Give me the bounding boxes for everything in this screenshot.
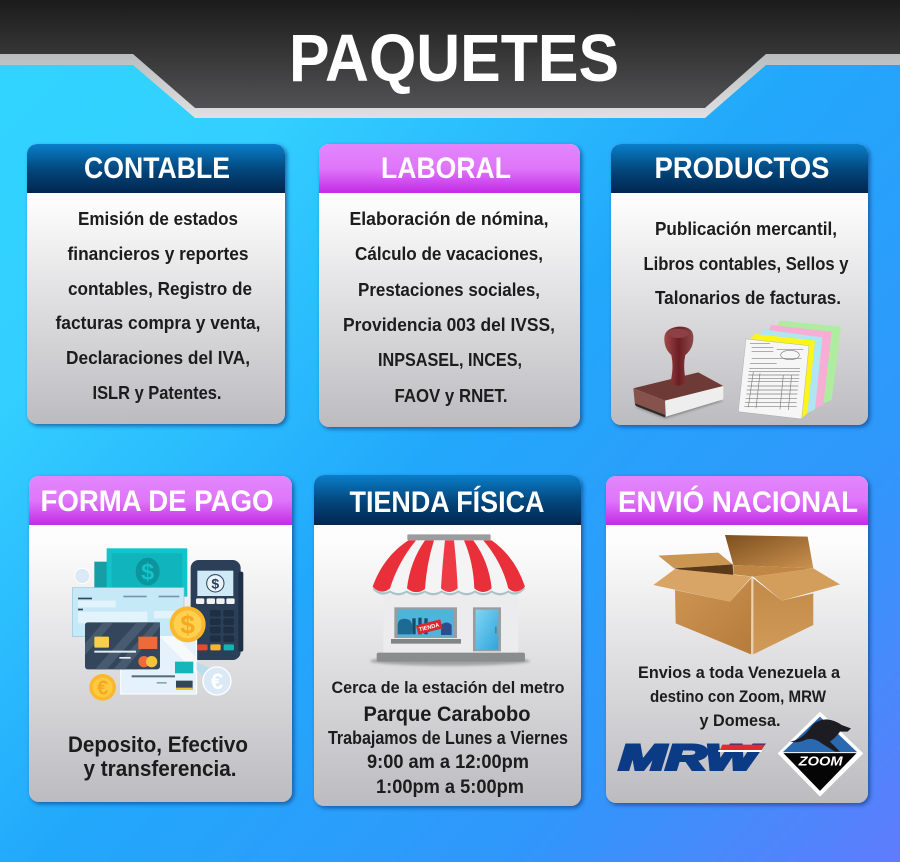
panel: envio nacional: ENVIÓ NACIONAL	[618, 485, 858, 519]
logo: ZOOM	[778, 712, 863, 797]
icon: store: TIENDA	[419, 623, 440, 633]
panel: contable: CONTABLE	[84, 152, 230, 185]
panel: tienda fisica: Trabajamos de Lunes a Viernes	[328, 728, 568, 748]
icon: payment methods: $	[211, 576, 219, 592]
icon: stamp	[633, 327, 723, 418]
logo: ZOOM: ZOOM	[798, 753, 844, 768]
panel: tienda fisica: Parque Carabobo	[364, 703, 530, 726]
panel: laboral: INPSASEL, INCES,	[378, 349, 522, 370]
panel: contable: Declaraciones del IVA,	[66, 347, 250, 368]
panel: tienda fisica: Cerca de la estación del metro	[332, 678, 564, 697]
panel: forma de pago	[29, 476, 292, 802]
panel: laboral: FAOV y RNET.	[394, 385, 508, 406]
panel: contable: ISLR y Patentes.	[92, 382, 222, 403]
logo: MRW: MRW	[619, 738, 763, 777]
panel: envio nacional: Envios a toda Venezuela a	[638, 663, 841, 682]
panel: contable	[27, 144, 285, 424]
panel: productos: Talonarios de facturas.	[655, 287, 841, 308]
panel: envio nacional: destino con Zoom, MRW	[650, 687, 827, 706]
panel: productos: Publicación mercantil,	[655, 218, 837, 239]
title: PAQUETES	[289, 21, 619, 96]
panel: laboral: LABORAL	[381, 152, 511, 185]
icon: payment methods	[72, 548, 243, 701]
panel: laboral	[319, 144, 580, 427]
panel: productos: PRODUCTOS	[654, 152, 830, 185]
panel: forma de pago: y transferencia.	[84, 756, 236, 781]
panel: laboral: Cálculo de vacaciones,	[355, 243, 543, 264]
panel: contable: facturas compra y venta,	[56, 312, 260, 333]
panel: tienda fisica: 9:00 am a 12:00pm	[367, 752, 529, 773]
panel: productos	[611, 144, 868, 425]
panel: tienda fisica	[314, 475, 581, 806]
panel: forma de pago: Deposito, Efectivo	[68, 732, 248, 757]
icon: cardboard box	[653, 535, 840, 654]
icon: payment methods: €	[211, 669, 223, 694]
panel: envio nacional	[606, 476, 868, 803]
header banner	[0, 0, 900, 118]
panel: laboral: Providencia 003 del IVSS,	[343, 314, 555, 335]
icon: payment methods: €	[97, 678, 108, 700]
icon: payment methods: $	[180, 610, 195, 640]
panel: forma de pago: FORMA DE PAGO	[40, 485, 274, 518]
panel: tienda fisica: 1:00pm a 5:00pm	[376, 777, 524, 798]
panel: productos: Libros contables, Sellos y	[644, 253, 849, 274]
panel: laboral: Elaboración de nómina,	[350, 208, 548, 229]
panel: envio nacional: y Domesa.	[700, 711, 780, 730]
icon: store	[370, 534, 530, 666]
icon: payment methods: $	[141, 559, 154, 585]
panel: contable: Emisión de estados	[78, 208, 238, 229]
panel: contable: contables, Registro de	[68, 278, 252, 299]
logo: MRW	[619, 738, 765, 777]
panel: laboral: Prestaciones sociales,	[358, 279, 540, 300]
panel: contable: financieros y reportes	[68, 243, 248, 264]
panel: tienda fisica: TIENDA FÍSICA	[350, 485, 544, 519]
icon: invoices	[738, 321, 841, 419]
